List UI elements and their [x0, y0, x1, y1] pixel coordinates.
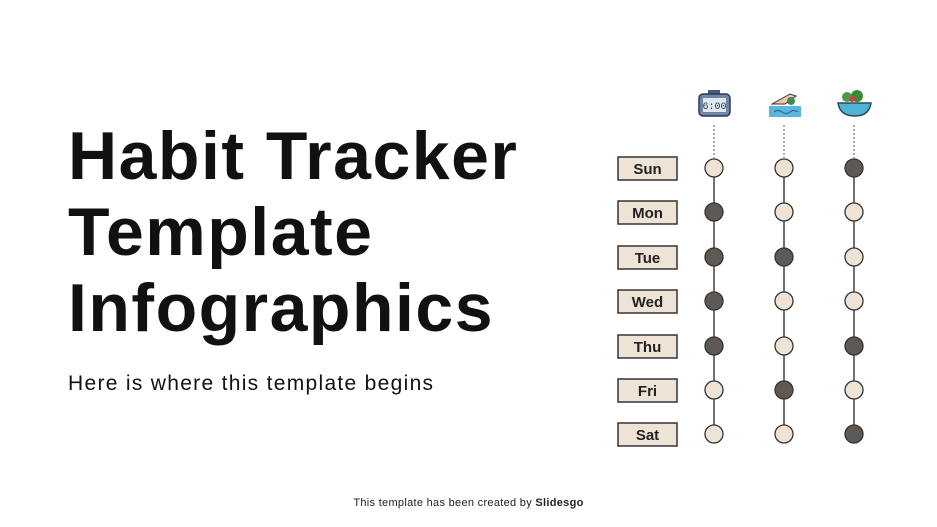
day labels: Tue — [635, 250, 660, 267]
day labels: Fri — [638, 383, 657, 400]
day labels: Sat — [636, 427, 659, 444]
title: Template — [68, 194, 373, 270]
day labels: Thu — [634, 339, 661, 356]
day labels: Mon — [632, 205, 663, 222]
icon: swimmer — [769, 94, 801, 117]
title: Infographics — [68, 270, 494, 346]
title: Habit Tracker — [68, 118, 518, 194]
day labels — [618, 157, 677, 446]
day labels: Wed — [632, 294, 663, 311]
title — [68, 118, 518, 346]
icon: alarm clock — [699, 90, 730, 116]
icon: salad bowl — [838, 90, 871, 116]
subtitle: Here is where this template begins — [68, 372, 434, 395]
footer: This template has been created by Slidesgo — [353, 497, 584, 509]
icon: alarm clock: 6:00 — [702, 102, 727, 113]
day labels: Sun — [633, 161, 662, 178]
habit circles — [705, 159, 863, 443]
